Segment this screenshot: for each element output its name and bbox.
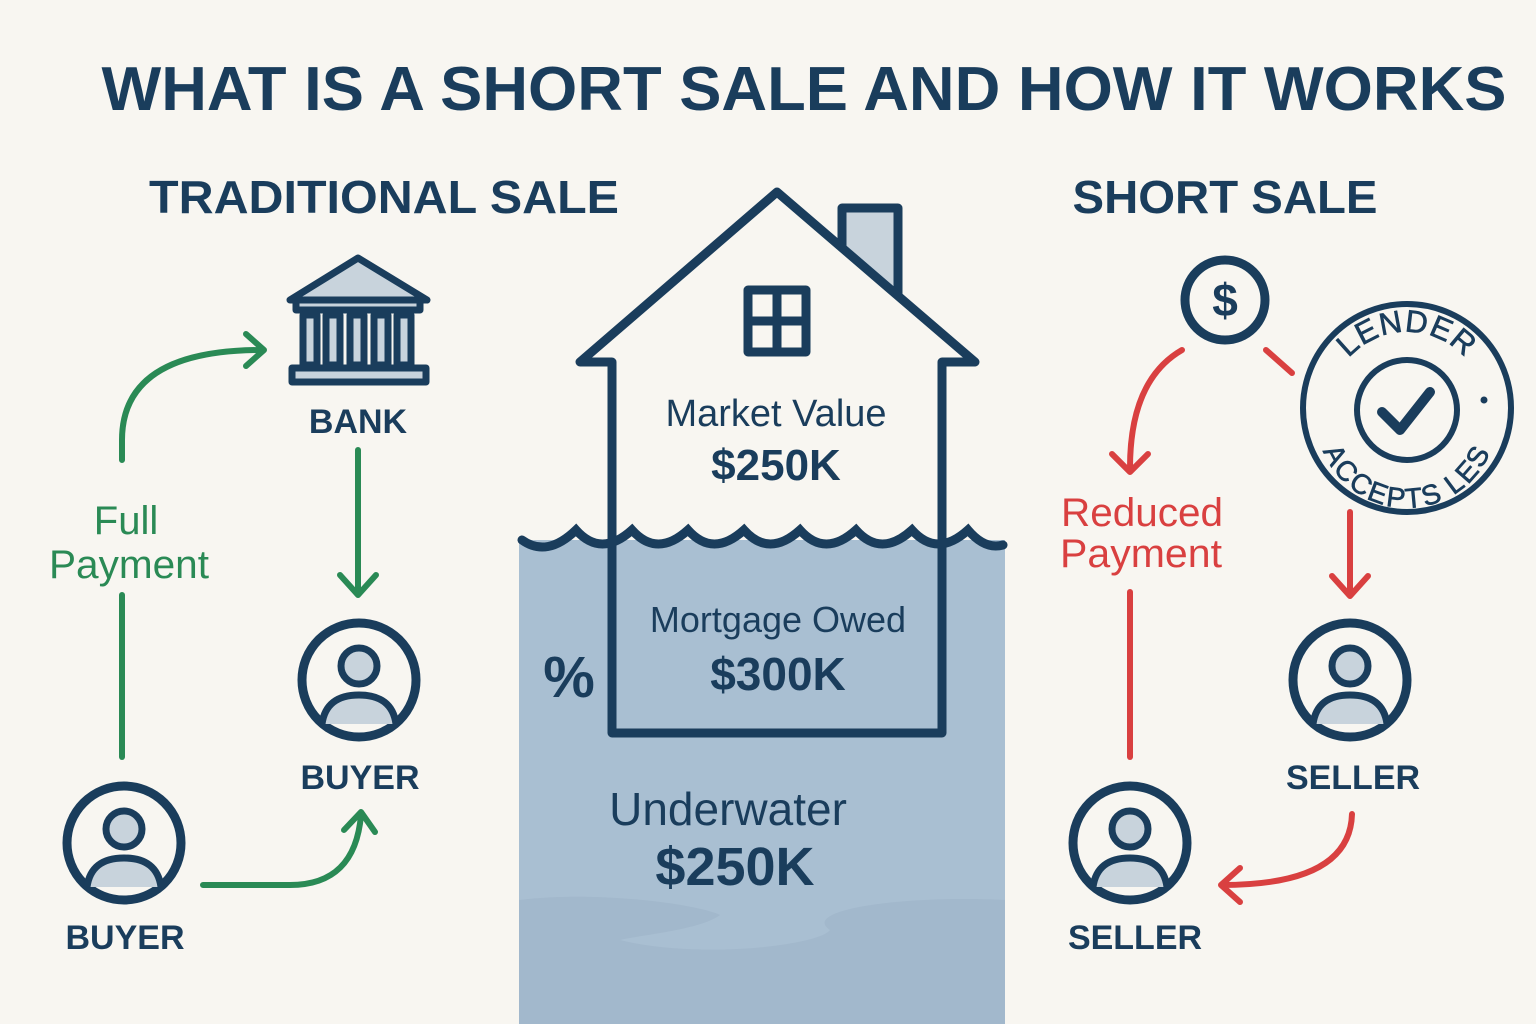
icon: bank <box>290 258 427 382</box>
water waves <box>522 530 1003 547</box>
label: reduced payment: Reduced <box>1061 491 1223 535</box>
label: full payment: Payment <box>49 543 209 587</box>
label: reduced payment: Payment <box>1060 532 1222 576</box>
mortgage owed text: $300K <box>710 648 846 700</box>
heading: short sale: SHORT SALE <box>1072 171 1378 223</box>
label: seller left: SELLER <box>1068 919 1202 957</box>
market value text: Market Value <box>665 393 887 435</box>
stamp: lender accepts: ACCEPTS LES <box>1322 446 1488 508</box>
icon: dollar: $ <box>1212 274 1238 326</box>
icon: seller left <box>1073 786 1187 900</box>
arrow: seller to seller <box>1221 814 1352 902</box>
title: WHAT IS A SHORT SALE AND HOW IT WORKS <box>102 55 1506 124</box>
market value text: $250K <box>711 441 841 490</box>
mortgage owed text <box>650 599 906 700</box>
arrow: dollar to reduced payment <box>1112 350 1292 472</box>
underwater text: Underwater <box>609 783 847 835</box>
label: bank: BANK <box>309 403 408 441</box>
label: seller right: SELLER <box>1286 759 1420 797</box>
arrow: bank to buyer <box>340 450 376 595</box>
icon: seller right <box>1293 623 1407 737</box>
arrow: stamp to seller <box>1130 512 1368 757</box>
label: buyer bottom: BUYER <box>65 919 185 957</box>
stamp: lender accepts: LENDER <box>1336 310 1475 357</box>
market value text <box>665 393 887 490</box>
icon: buyer bottom <box>67 786 181 900</box>
mortgage owed text: Mortgage Owed <box>650 599 906 640</box>
label: full payment <box>49 499 209 587</box>
heading: traditional sale: TRADITIONAL SALE <box>149 171 619 223</box>
icon: dollar <box>1185 260 1265 340</box>
label: reduced payment <box>1060 491 1223 576</box>
underwater text <box>609 783 847 897</box>
arrow: full payment path <box>122 334 264 757</box>
stamp: lender accepts <box>1300 301 1514 515</box>
arrow: buyer to buyer <box>203 812 375 885</box>
percent icon: % <box>543 645 595 710</box>
label: buyer top: BUYER <box>300 759 420 797</box>
house <box>580 192 975 733</box>
label: full payment: Full <box>94 499 158 543</box>
icon: buyer top <box>302 623 416 737</box>
water <box>519 540 1005 1024</box>
underwater text: $250K <box>655 837 815 897</box>
